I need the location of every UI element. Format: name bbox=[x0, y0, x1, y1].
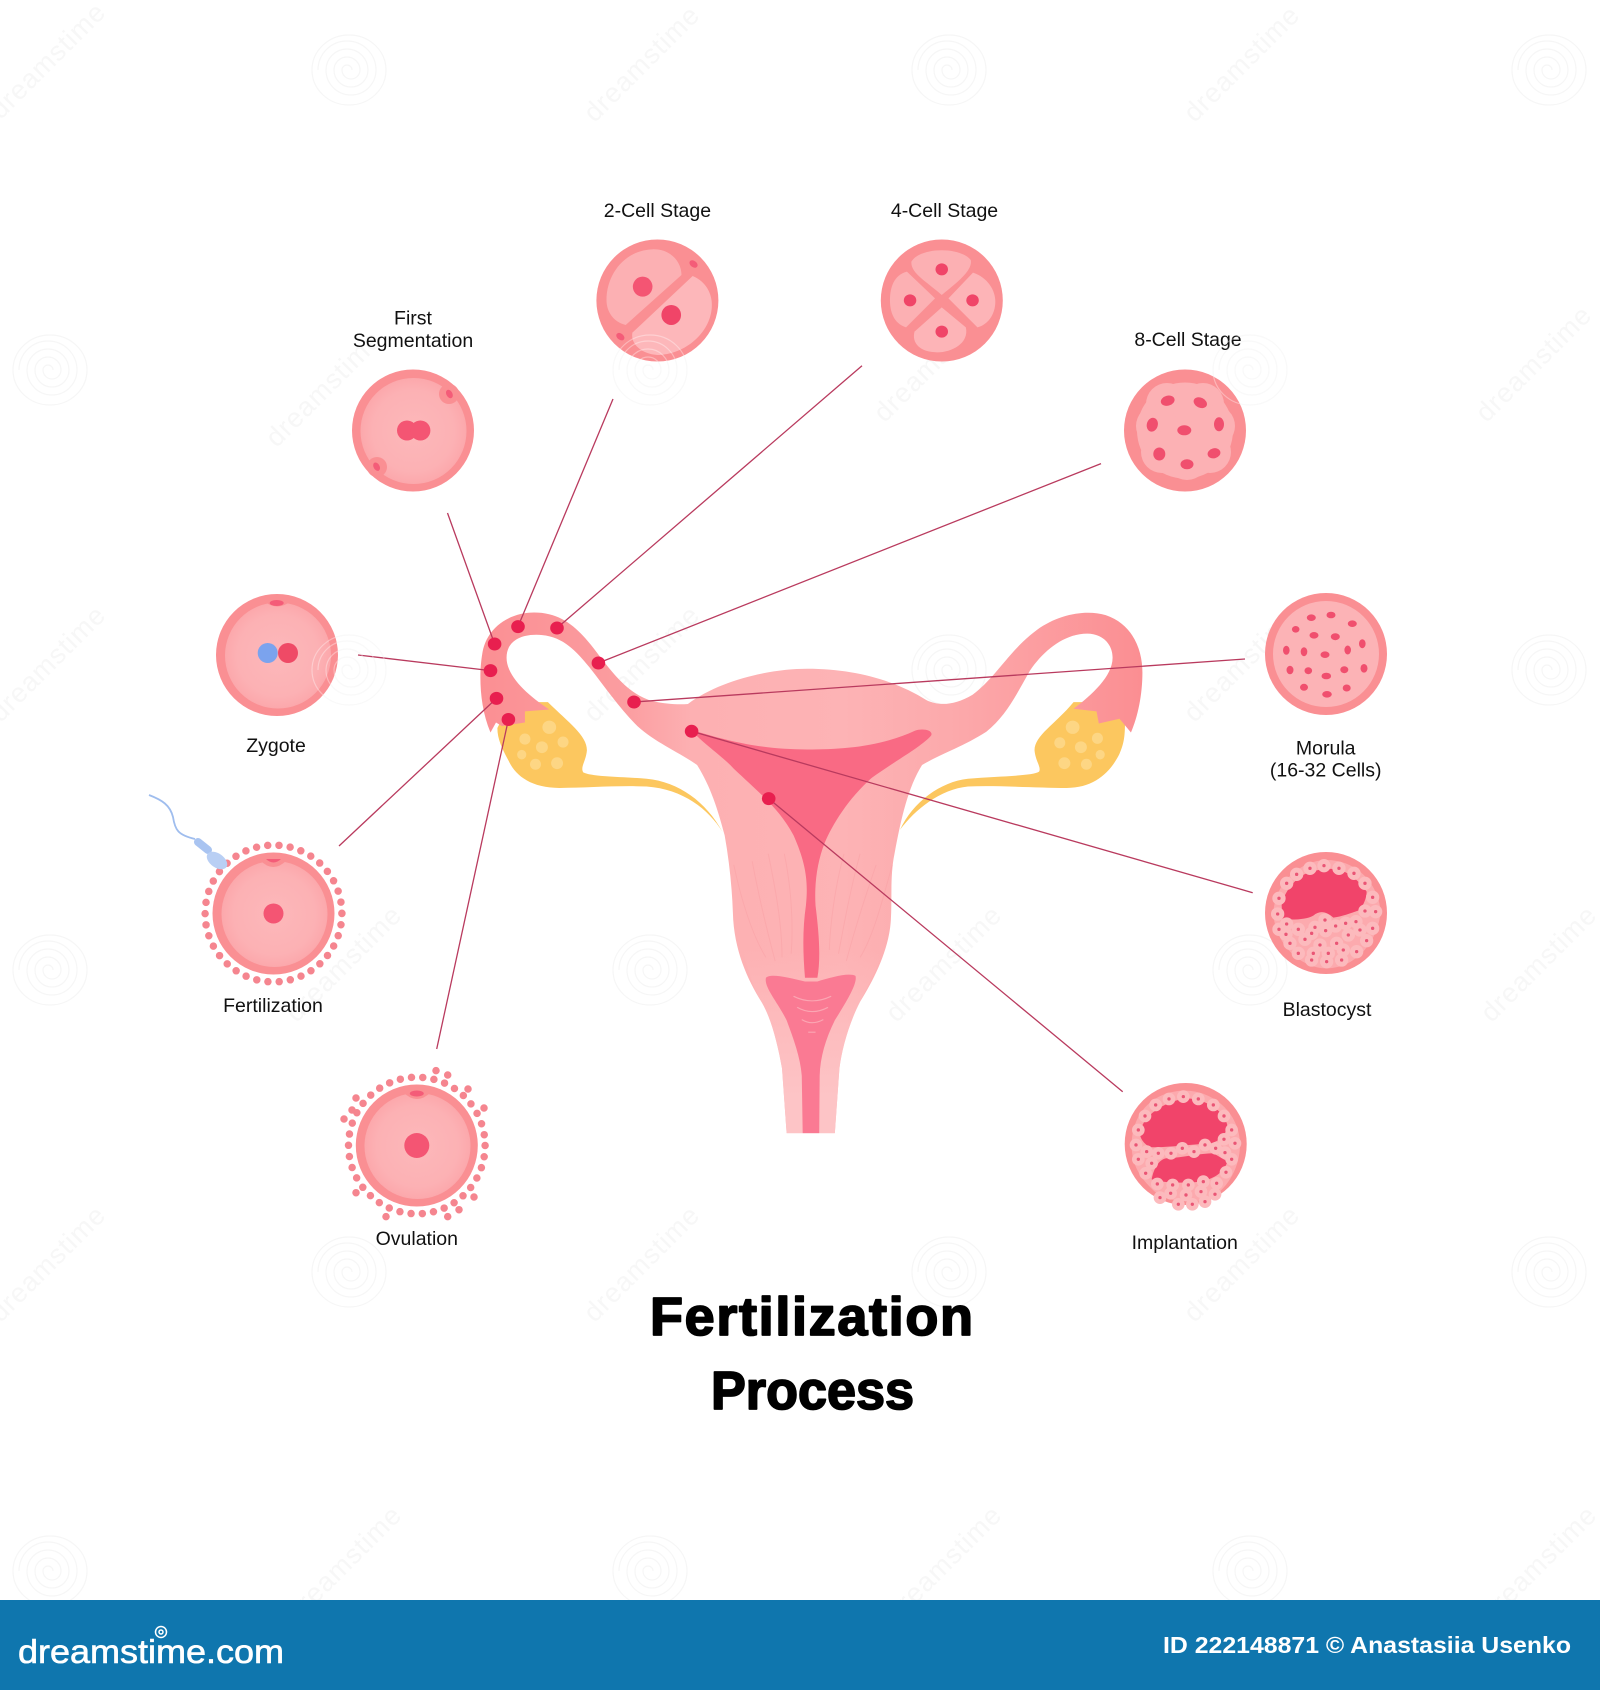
label: Fertilization: Fertilization bbox=[223, 995, 323, 1017]
title: Process bbox=[711, 1361, 914, 1421]
text: dreamstime bbox=[280, 1500, 408, 1628]
label: Zygote: Zygote bbox=[246, 735, 306, 757]
location dots along the tract bbox=[484, 620, 776, 805]
stage: 8-cell bbox=[1124, 370, 1246, 492]
connector lines bbox=[339, 366, 1253, 1092]
label: First Segmentation bbox=[353, 308, 473, 352]
right ovary and ligament bbox=[900, 702, 1125, 830]
label: First Segmentation: Segmentation bbox=[353, 330, 473, 352]
uterine cavity bbox=[692, 729, 932, 978]
stage: zygote bbox=[216, 594, 338, 716]
stage: fertilization bbox=[205, 845, 342, 982]
title bbox=[650, 1287, 973, 1421]
corona dots bbox=[344, 1071, 485, 1217]
text: dreamstime bbox=[1178, 600, 1306, 728]
label: Morula bbox=[1270, 738, 1382, 782]
footer credit: ID 222148871 © Anastasiia Usenko bbox=[1163, 1632, 1571, 1658]
left ovary and ligament bbox=[497, 702, 722, 832]
label: Implantation: Implantation bbox=[1132, 1232, 1238, 1254]
stage: ovulation bbox=[344, 1071, 485, 1217]
footer bar bbox=[0, 1600, 1600, 1690]
label: Ovulation: Ovulation bbox=[376, 1228, 458, 1250]
text: dreamstime bbox=[578, 600, 706, 728]
text: dreamstime bbox=[1475, 1500, 1600, 1628]
stage: implantation bbox=[1125, 1083, 1247, 1205]
stage: blastocyst bbox=[1265, 852, 1387, 974]
uterus anatomy diagram bbox=[480, 613, 1142, 1133]
label: 4-Cell Stage: 4-Cell Stage bbox=[891, 200, 998, 222]
title: Fertilization bbox=[650, 1287, 973, 1347]
label: 2-Cell Stage: 2-Cell Stage bbox=[604, 200, 711, 222]
text: dreamstime bbox=[578, 1200, 706, 1328]
cervix and vagina canal bbox=[766, 975, 856, 1133]
text: dreamstime bbox=[578, 0, 706, 128]
muscle fibre lines bbox=[734, 854, 892, 961]
label: 8-Cell Stage: 8-Cell Stage bbox=[1134, 329, 1242, 351]
text: dreamstime bbox=[1470, 300, 1598, 428]
label: Morula: (16-32 Cells) bbox=[1270, 760, 1382, 782]
corona dots bbox=[205, 845, 342, 982]
text: dreamstime bbox=[260, 325, 388, 453]
stage: first segmentation bbox=[352, 370, 474, 492]
footer logo: dreamstime.com: dreamstime.com bbox=[18, 1633, 284, 1670]
icon: sperm bbox=[149, 795, 230, 873]
stage: 4-cell bbox=[881, 240, 1003, 362]
lower vaginal canal tint bbox=[743, 950, 883, 1133]
text: dreamstime bbox=[880, 1500, 1008, 1628]
stage: morula bbox=[1265, 593, 1387, 715]
label: Morula: Morula bbox=[1296, 738, 1356, 760]
text: dreamstime bbox=[868, 300, 996, 428]
uterus body and fallopian tubes bbox=[480, 613, 1142, 1133]
label: Blastocyst: Blastocyst bbox=[1283, 999, 1372, 1021]
text: dreamstime bbox=[1178, 1200, 1306, 1328]
label: First Segmentation: First bbox=[394, 308, 433, 330]
text: dreamstime bbox=[280, 900, 408, 1028]
text: dreamstime bbox=[1475, 900, 1600, 1028]
text: dreamstime bbox=[1178, 0, 1306, 128]
stage: 2-cell bbox=[596, 240, 718, 362]
text: dreamstime bbox=[880, 900, 1008, 1028]
